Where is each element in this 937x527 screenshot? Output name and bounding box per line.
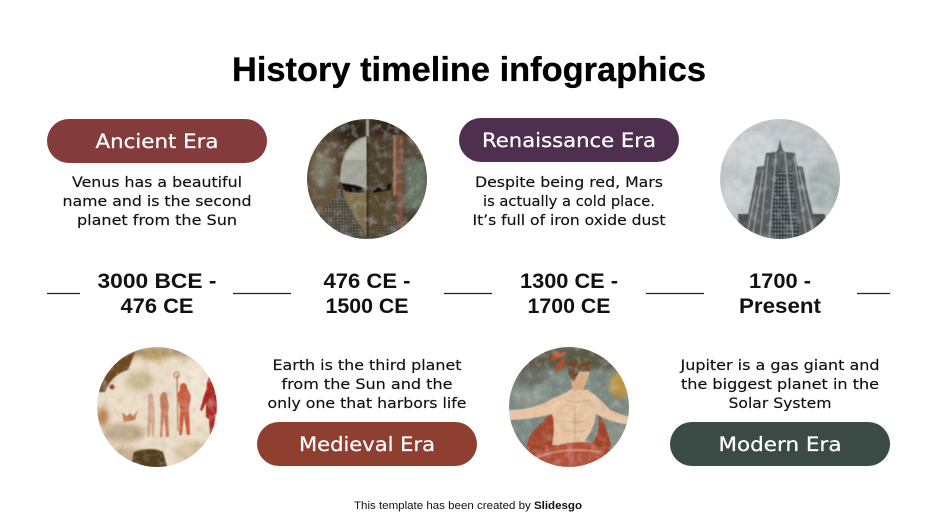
date: 3000 BCE - 476 CE: 3000 BCE - bbox=[98, 269, 216, 293]
panel: medieval era bbox=[257, 119, 477, 466]
panel: ancient era bbox=[47, 119, 267, 470]
text: modern era description: Solar System bbox=[728, 396, 832, 412]
pill: ancient era: Ancient Era bbox=[96, 130, 218, 153]
panel: modern era bbox=[670, 119, 890, 466]
text: renaissance era description: is actually a cold place. bbox=[483, 194, 655, 210]
title: History timeline infographics bbox=[232, 51, 706, 89]
date: 1700 - Present: 1700 - bbox=[749, 269, 811, 293]
text: renaissance era description: Despite being red, Mars bbox=[475, 175, 663, 191]
date: 476 CE - 1500 CE: 476 CE - bbox=[324, 269, 410, 293]
date: 1300 CE - 1700 CE: 1300 CE - bbox=[520, 269, 618, 293]
text: medieval era description: Earth is the third planet bbox=[272, 358, 462, 374]
text: modern era description: the biggest planet in the bbox=[681, 377, 879, 393]
image: cave painting bbox=[95, 347, 217, 470]
pill: modern era: Modern Era bbox=[718, 433, 842, 456]
text: ancient era description: name and is the second bbox=[62, 194, 252, 210]
pill: renaissance era: Renaissance Era bbox=[482, 129, 656, 152]
date: 476 CE - 1500 CE: 1500 CE bbox=[326, 294, 408, 318]
panel: renaissance era bbox=[459, 118, 679, 467]
pill: renaissance era bbox=[459, 118, 679, 162]
date: 1300 CE - 1700 CE: 1700 CE bbox=[528, 294, 610, 318]
date: 3000 BCE - 476 CE: 476 CE bbox=[120, 294, 194, 318]
text: medieval era description: from the Sun and the bbox=[282, 377, 452, 393]
footer credit: This template has been created by Slidesgo bbox=[354, 500, 582, 512]
text: ancient era description bbox=[62, 175, 252, 229]
pill: ancient era bbox=[47, 119, 267, 163]
date: 1300 CE - 1700 CE bbox=[520, 269, 618, 318]
image: knight helmet bbox=[307, 119, 427, 239]
date: 3000 BCE - 476 CE bbox=[98, 269, 216, 318]
text: ancient era description: Venus has a beautiful bbox=[72, 175, 242, 191]
text: medieval era description: only one that harbors life bbox=[268, 396, 466, 412]
date: 1700 - Present bbox=[739, 269, 821, 318]
text: renaissance era description bbox=[472, 175, 666, 229]
pill: medieval era bbox=[257, 422, 477, 466]
date: 1700 - Present: Present bbox=[739, 294, 821, 318]
text: modern era description bbox=[679, 358, 880, 412]
pill: modern era bbox=[670, 422, 890, 466]
image: skyscraper bbox=[720, 119, 844, 240]
text: ancient era description: planet from the Sun bbox=[77, 213, 237, 229]
text: renaissance era description: It’s full of iron oxide dust bbox=[472, 213, 666, 229]
date: 476 CE - 1500 CE bbox=[324, 269, 410, 318]
text: modern era description: Jupiter is a gas giant and bbox=[679, 358, 880, 374]
text: medieval era description bbox=[268, 358, 466, 412]
pill: medieval era: Medieval Era bbox=[299, 433, 435, 456]
image: classical fresco figure bbox=[508, 347, 630, 467]
